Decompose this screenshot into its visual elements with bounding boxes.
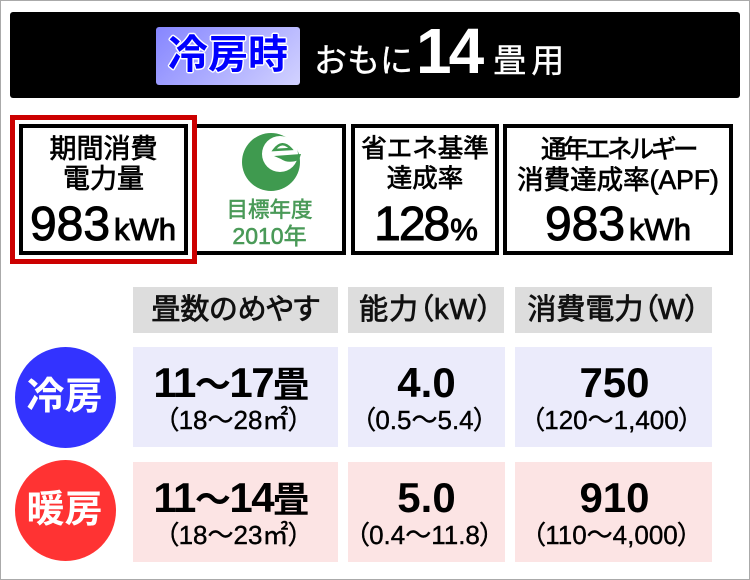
label: 省エネ基準 <box>361 135 489 163</box>
column heading: capacity <box>348 287 504 333</box>
cell: heating power: （110〜4,000） <box>532 520 691 550</box>
cell: cooling capacity <box>348 347 505 447</box>
cell: heating capacity: （0.4〜11.8） <box>356 520 493 550</box>
label: target year: 2010年 <box>232 223 307 249</box>
cell: cooling power <box>515 347 712 447</box>
badge: cooling mode <box>156 27 300 85</box>
column heading: tatami: 畳数のめやす <box>151 294 320 326</box>
panel: energy label <box>188 124 346 255</box>
cell: cooling capacity: （0.5〜5.4） <box>362 405 487 435</box>
panel: energy saving achievement <box>351 124 499 255</box>
cell: cooling tatami: （18〜28㎡） <box>166 405 301 435</box>
badge: cooling: 冷房 <box>26 376 102 418</box>
column heading: capacity: 能力（kW） <box>359 294 493 326</box>
label: 期間消費 <box>50 134 158 164</box>
cell: cooling tatami <box>133 347 338 447</box>
label: 通年エネルギー <box>541 136 695 164</box>
label: 消費達成率(APF) <box>517 165 719 195</box>
cell: cooling power: （120〜1,400） <box>531 405 692 435</box>
cell: heating tatami: 11〜14畳 <box>153 474 308 521</box>
heading: mainly for 14 tatami: おもに14 畳用 <box>314 15 569 87</box>
badge: heating <box>15 460 116 561</box>
cell: heating capacity: 5.0 <box>397 474 456 521</box>
cell: cooling tatami: 11〜17畳 <box>153 359 308 406</box>
label: 電力量 <box>63 164 144 194</box>
badge: cooling mode: 冷房時 <box>168 33 288 77</box>
label: 達成率 <box>387 165 463 193</box>
cell: heating tatami <box>133 462 338 562</box>
cell: heating power <box>515 462 712 562</box>
icon: e-mark <box>242 133 301 191</box>
label: target year: 目標年度 <box>226 198 312 222</box>
panel: period power consumption <box>19 124 188 255</box>
label <box>50 134 158 194</box>
header bar <box>10 12 740 98</box>
cell: heating capacity <box>348 462 505 562</box>
value: 128% <box>374 198 476 251</box>
cell: heating tatami: （18〜23㎡） <box>166 520 301 550</box>
cell: cooling power: 750 <box>579 359 650 406</box>
label: target year <box>226 198 312 249</box>
label <box>517 136 719 195</box>
cell: cooling capacity: 4.0 <box>397 359 456 406</box>
label <box>361 134 489 193</box>
badge: heating: 暖房 <box>26 489 102 531</box>
column heading: power: 消費電力（W） <box>527 294 700 326</box>
column heading: tatami <box>133 287 338 333</box>
badge: cooling <box>15 347 116 448</box>
panel: APF <box>503 124 733 255</box>
cell: heating power: 910 <box>579 474 650 521</box>
panel: highlight frame <box>10 115 197 264</box>
value: 983kWh <box>545 198 691 251</box>
value: 983kWh <box>30 198 176 251</box>
column heading: power <box>515 287 712 333</box>
